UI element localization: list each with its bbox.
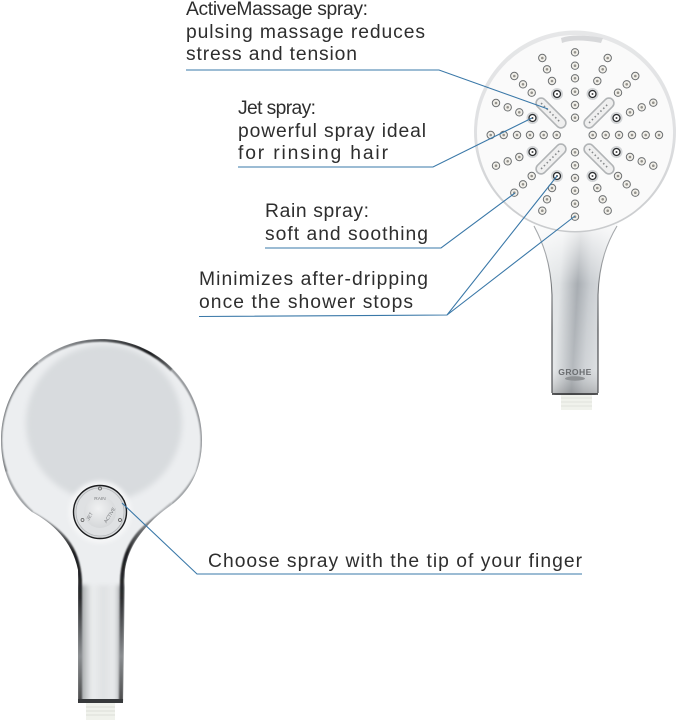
callout: choose spray bbox=[122, 503, 583, 574]
rim shading bbox=[1, 362, 202, 512]
selector labels: RAIN bbox=[94, 496, 106, 502]
GROHE logo: GROHE bbox=[558, 367, 592, 377]
jet nozzles bbox=[526, 88, 622, 182]
Jet text bbox=[238, 98, 426, 164]
head disc bbox=[474, 30, 676, 232]
neck dark edges bbox=[30, 504, 172, 705]
Jet text: for rinsing hair bbox=[238, 143, 389, 164]
callout: ActiveMassage spray bbox=[186, 0, 548, 109]
selector button bbox=[69, 481, 131, 543]
after-dripping leaders bbox=[199, 176, 575, 316]
rear face panel bbox=[26, 345, 182, 501]
after-dripping text: Minimizes after-dripping bbox=[199, 269, 428, 290]
rain nozzles bbox=[487, 49, 663, 220]
shower head front view bbox=[474, 30, 676, 410]
rear body bbox=[0, 335, 205, 710]
callout: Rain spray bbox=[265, 193, 515, 248]
Rain text bbox=[265, 201, 428, 245]
callout: Jet spray bbox=[238, 98, 532, 167]
selector labels: JET bbox=[85, 511, 95, 522]
after-dripping text: once the shower stops bbox=[199, 292, 413, 313]
Rain text: Rain spray: bbox=[265, 201, 369, 222]
ActiveMassage text: stress and tension bbox=[186, 44, 357, 65]
ActiveMassage leader bbox=[186, 70, 548, 109]
thread connector bbox=[561, 394, 592, 410]
Rain text: soft and soothing bbox=[265, 224, 428, 245]
handle front bbox=[533, 224, 618, 395]
rear thread connector bbox=[86, 702, 115, 720]
Jet leader bbox=[238, 118, 532, 167]
callout: after-dripping bbox=[199, 176, 575, 316]
Jet text: Jet spray: bbox=[238, 98, 316, 119]
selector labels bbox=[85, 496, 117, 524]
choose spray text: Choose spray with the tip of your finger bbox=[208, 551, 583, 572]
Jet text: powerful spray ideal bbox=[238, 121, 426, 142]
Rain leader bbox=[265, 193, 515, 248]
spray slots bbox=[534, 96, 616, 176]
shower head rear view bbox=[0, 335, 205, 720]
ActiveMassage text bbox=[186, 0, 425, 65]
ActiveMassage text: pulsing massage reduces bbox=[186, 22, 425, 43]
selector labels: ACTIVE bbox=[103, 507, 117, 524]
choose spray leader bbox=[122, 503, 582, 574]
after-dripping text bbox=[199, 269, 428, 313]
